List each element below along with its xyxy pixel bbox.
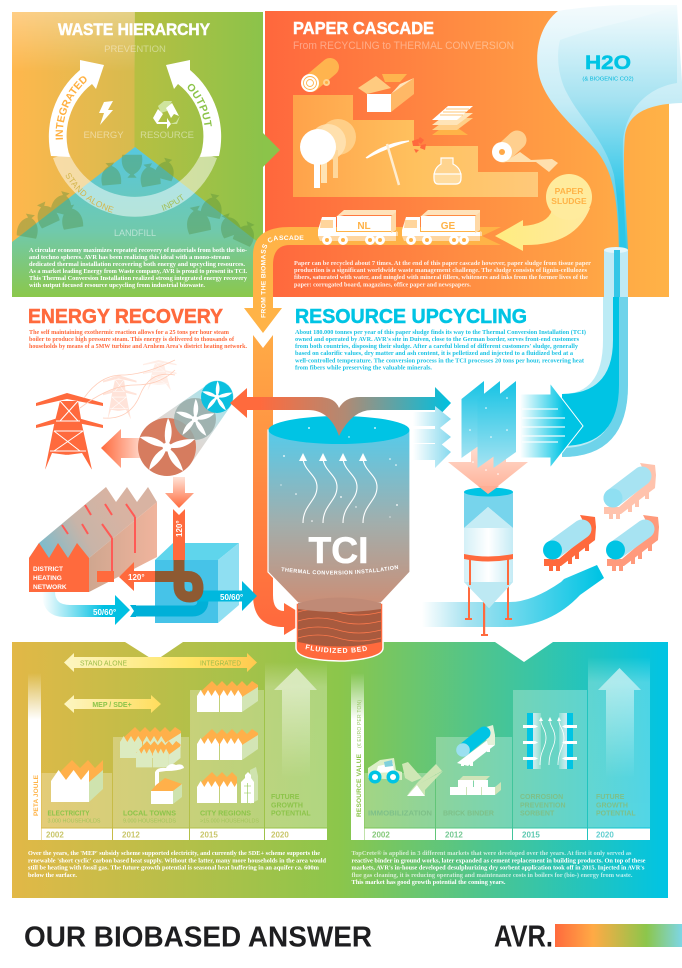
label: TCI: TCI	[308, 530, 368, 571]
tanker: left	[543, 515, 596, 571]
arrow: MEP / SDE+	[64, 695, 161, 713]
text block: resource growth	[352, 850, 646, 886]
labels: markets: CORROSION	[520, 794, 563, 801]
icon: ink jar	[434, 158, 461, 184]
text block: resource upcycling: owned and operated by AVR. AVR's site in Duiven, close to the German border, serves front-end customers	[295, 337, 580, 343]
label: resource: RESOURCE	[140, 130, 194, 141]
red stripes	[62, 504, 135, 572]
label: prevention: PREVENTION	[104, 44, 166, 55]
tanker trucks	[543, 463, 659, 571]
wavy bed lines	[298, 609, 381, 641]
arc label: stand alone: STAND ALONE	[66, 173, 114, 213]
icon: log	[301, 67, 330, 92]
pipe: blue through cube	[130, 581, 257, 617]
arrow: flow splitting to vessel and filter	[260, 387, 451, 436]
text block: energy recovery: boiler to produce high pressure steam. This energy is delivered to thousands of	[29, 337, 235, 343]
silo opening	[464, 488, 513, 496]
silo legs	[465, 555, 512, 636]
arrow: sludge to trucks	[495, 208, 590, 251]
arrow: integrated	[49, 60, 104, 157]
years: 2020	[596, 830, 614, 840]
icon: cement tanker	[456, 725, 495, 766]
circle: paper sludge: PAPER	[555, 186, 583, 196]
glass pipe	[604, 247, 628, 297]
years: 2002	[372, 830, 390, 840]
tanker: top	[604, 463, 656, 519]
label: landfill: LANDFILL	[114, 228, 156, 238]
blue return pipe	[42, 592, 130, 625]
labels: markets: PREVENTION	[520, 802, 566, 810]
district heating network	[29, 487, 157, 592]
icon: cardboard box	[358, 74, 414, 112]
axis label: resource value: RESOURCE VALUE	[356, 753, 363, 817]
stepped paper area	[293, 95, 538, 197]
text block: waste hierarchy	[29, 248, 248, 289]
front with label	[29, 543, 89, 592]
icon: lightning bolt	[99, 101, 113, 125]
text block: energy recovery	[29, 330, 247, 350]
footer title: OUR BIOBASED ANSWER	[24, 922, 372, 954]
columns	[42, 690, 264, 828]
text block: energy growth: renewable 'short cyclic' carbon based heat supply. Without the latter, many more households in the area would	[28, 858, 327, 864]
text block: energy recovery: households by means of a 5MW turbine and Arnhem Area's district heating network.	[29, 344, 247, 350]
text block: resource growth: flue gas cleaning, it is reducing operating and maintenance costs in boilers for (bio-) energy from waste.	[352, 872, 633, 879]
label: H2O: H2O	[585, 53, 631, 74]
years	[46, 830, 289, 840]
labels: households	[48, 819, 259, 825]
pipe: orange heat through cube	[97, 509, 198, 597]
icon: material pile	[407, 764, 443, 796]
text block: paper cascade: paper: corrugated board, magazines, office paper and newspapers.	[294, 282, 472, 288]
text block: waste hierarchy: with output focused resource upcycling from industrial biowaste.	[29, 283, 206, 289]
arrow: future growth	[274, 668, 317, 778]
years: 2002	[46, 830, 64, 840]
circle: paper sludge: SLUDGE	[551, 196, 587, 206]
text block: paper cascade: Paper can be recycled about 7 times. At the end of this paper cascade however, paper sludge from tissue paper	[294, 261, 591, 267]
fluidized bed base	[296, 603, 383, 661]
text block: paper cascade	[294, 261, 591, 288]
labels: markets: IMMOBILIZATION	[368, 811, 432, 818]
labels: column names: GROWTH	[271, 802, 303, 810]
text block: waste hierarchy: dedicated thermal installation recovering both energy and upcycling resources.	[29, 262, 246, 268]
heat exchanger cube	[155, 543, 239, 623]
text block: resource growth: This market has good growth potential the coming years.	[352, 880, 506, 886]
icon: local factory with smoke	[151, 764, 184, 804]
truck: GE	[402, 210, 482, 245]
silo band	[464, 554, 513, 562]
icon: city regions row two	[197, 729, 258, 760]
text block: resource upcycling: from fibers while preserving the valuable minerals.	[295, 366, 433, 372]
logo: AVR: AVR.	[494, 918, 553, 954]
years: 2015	[522, 830, 540, 840]
arrow: biomass cascade band	[253, 227, 501, 297]
icon: local towns factories	[120, 727, 181, 767]
labels: markets: POTENTIAL	[596, 811, 636, 818]
icon: turbine	[138, 381, 233, 476]
icon: main pylon	[36, 393, 103, 470]
icon: corrosion filter	[523, 713, 577, 769]
heading: energy recovery: ENERGY RECOVERY	[28, 305, 223, 328]
panel: waste hierarchy	[12, 12, 263, 297]
years	[372, 830, 614, 840]
arrow: output	[166, 60, 221, 157]
arrow: green notch between panels	[263, 133, 280, 167]
years: 2012	[445, 830, 463, 840]
text block: resource upcycling: well-controlled temperature. The conversion process in the TCI processes 20 tons per hour, recovering heat	[295, 358, 584, 364]
heading: resource upcycling: RESOURCE UPCYCLING	[295, 305, 527, 328]
year row	[364, 828, 650, 840]
silo body	[464, 492, 513, 608]
labels: column names: POTENTIAL	[271, 811, 311, 818]
icon: ore fragments	[412, 137, 426, 153]
text block: resource upcycling: based on calorific values, dry matter and ash content, it is pelletized and injected to a fluidized bed at a	[295, 351, 573, 357]
title: paper cascade: PAPER CASCADE	[293, 18, 434, 38]
labels: markets: FUTURE	[596, 794, 625, 801]
text block: paper cascade: fibers, saturated with water, and mingled with mineral fillers, whiteners and inks from the former lives of the	[294, 275, 588, 281]
icon: electricity factory	[51, 760, 103, 802]
silo	[464, 486, 513, 636]
icon: pulp roll	[300, 119, 356, 188]
rising heat arrows	[299, 453, 377, 523]
text block: energy growth: Over the years, the 'MEP' subsidy scheme supported electricity, and currently the SDE+ scheme supports the	[28, 851, 320, 857]
text block: resource growth: TopCrete® is applied in 3 different markets that were developed over the years. At first it only served as	[352, 850, 632, 857]
panel: paper cascade	[253, 11, 669, 297]
labels: markets: BRICK BINDER	[443, 811, 494, 818]
text block: energy recovery: The self maintaining exothermic reaction allows for a 25 tons per hour steam	[29, 330, 229, 336]
label: 50/60 left: 50/60°	[93, 608, 116, 617]
filter particles	[469, 397, 508, 475]
trucks	[318, 210, 482, 245]
labels: column names: FUTURE	[271, 794, 300, 801]
title: waste hierarchy: WASTE HIERARCHY	[58, 21, 210, 39]
landfill triangle	[12, 147, 263, 297]
ring: lower input arc	[53, 153, 217, 217]
subtitle: From RECYCLING to THERMAL CONVERSION	[293, 40, 514, 52]
vessel top opening	[268, 416, 410, 444]
logo gradient bar	[555, 924, 682, 947]
truck: NL	[318, 210, 398, 245]
labels: column names: ELECTRICITY	[48, 811, 90, 818]
label: 50/60 right: 50/60°	[220, 593, 243, 602]
arrow: MEP / SDE+: MEP / SDE+	[92, 702, 132, 709]
chart: resource value growth	[351, 657, 650, 840]
roof	[29, 487, 157, 558]
blue flow: resource out to trucks	[422, 565, 604, 627]
curved label: fluidized bed: FLUIDIZED BED	[306, 644, 367, 653]
small arrows: to filter	[413, 406, 451, 468]
vessel body	[268, 430, 410, 603]
arrow: stand alone to integrated: INTEGRATED	[200, 660, 241, 668]
arc label: integrated: INTEGRATED	[56, 76, 87, 140]
years: 2015	[200, 830, 218, 840]
icon: wheel loader	[368, 758, 422, 784]
arrow: steam into turbine	[230, 388, 272, 418]
text block: paper cascade: production is a significant worldwide waste management challenge. The sludge consists of lignin-cellulozes	[294, 268, 588, 274]
text block: resource growth: markets, AVR's in-house developed desulphurizing dry sorbent application took off in 2015. Injected in AVR's	[352, 866, 645, 872]
label: 120 horizontal: 120°	[128, 573, 145, 582]
year row	[42, 828, 327, 840]
circle: paper sludge	[546, 174, 592, 220]
labels: markets: GROWTH	[596, 802, 628, 810]
particles	[280, 427, 398, 522]
curved label: thermal conversion installation: THERMAL CONVERSION INSTALLATION	[282, 565, 398, 574]
truck: NL: NL	[357, 221, 371, 232]
text block: energy growth: still be heating with fossil gas. The future growth potential is seasonal heat buffering in an aquifer ca. 600m	[28, 866, 319, 872]
arc label: output: OUTPUT	[188, 84, 212, 126]
axis	[28, 673, 41, 840]
pink arrow: filter to silo	[448, 440, 528, 494]
years: 2020	[271, 830, 289, 840]
label: district heating network: HEATING	[33, 575, 62, 582]
arrow: to pylon	[101, 429, 140, 468]
arrow: turbine down	[165, 477, 194, 508]
labels: markets: SORBENT	[520, 811, 555, 818]
panel: bottom charts background	[12, 642, 668, 898]
arrow: future growth	[598, 668, 641, 778]
text block: resource upcycling: About 180.000 tonnes per year of this paper sludge finds its way to the Thermal Conversion Installation (TCI)	[295, 329, 586, 336]
years: 2012	[122, 830, 140, 840]
label: biogenic co2: (& BIOGENIC CO2)	[582, 76, 634, 82]
icon: city regions row three	[197, 772, 237, 803]
truck: GE: GE	[441, 221, 456, 232]
labels: column names: CITY REGIONS	[200, 811, 251, 818]
text block: energy growth	[28, 851, 327, 879]
text block: waste hierarchy: and techno spheres. AVR has been realizing this ideal with a mono-stream	[29, 255, 230, 261]
label: 120 vertical: 120°	[175, 520, 184, 537]
icon: city regions row one	[197, 681, 258, 712]
labels: column names	[48, 794, 311, 818]
icons: waste bags	[16, 155, 260, 247]
text block: resource upcycling: from both countries, disposing their sludge. After a careful blend of different customers' sludge, generally	[295, 344, 578, 350]
label: district heating network: NETWORK	[33, 584, 67, 591]
chart: energy growth	[28, 653, 327, 840]
text block: waste hierarchy: A circular economy maximizes repeated recovery of materials from both the bio-	[29, 248, 247, 254]
filter plates	[462, 381, 516, 468]
icon: tissue roll	[492, 140, 558, 172]
labels: households: >15.000 HOUSEHOLDS	[200, 819, 259, 825]
label: district heating network	[33, 566, 67, 591]
labels: column names: LOCAL TOWNS	[123, 811, 176, 818]
label: from the biomass cascade: FROM THE BIOMASS CASCADE	[260, 236, 304, 318]
water stream: H2O	[537, 5, 682, 250]
arrow: stand alone to integrated	[64, 653, 257, 672]
big arrow: to water stream	[520, 297, 628, 468]
labels: households: 3.000 HOUSEHOLDS	[48, 819, 101, 825]
columns	[364, 690, 587, 828]
text block: energy growth: below the surface.	[28, 873, 78, 879]
label: district heating network: DISTRICT	[33, 566, 63, 573]
TCI vessel	[267, 387, 451, 662]
arrow: stand alone to integrated: STAND ALONE	[80, 660, 127, 668]
tanker: right	[606, 515, 659, 571]
icon: recycle	[153, 101, 180, 129]
icon: pickaxe	[366, 141, 409, 185]
arrow: biomass band down	[244, 236, 304, 635]
text block: waste hierarchy: As a market leading Energy from Waste company, AVR is proud to present its TCI.	[29, 269, 248, 275]
text block: waste hierarchy: This Thermal Conversion Installation realized strong integrated energy recovery	[29, 276, 247, 282]
icon: ghost pylons and cables	[80, 360, 176, 420]
bed top shadow	[298, 598, 381, 612]
axis label: peta joule: PETA JOULE	[33, 774, 40, 816]
icon: paper stack	[432, 106, 473, 135]
labels: households: 9.000 HOUSEHOLDS	[123, 819, 176, 825]
axis	[351, 673, 364, 840]
text block: resource upcycling	[295, 329, 586, 372]
text block: resource growth: reactive binder in ground works, later expanded as cement replacement in building products. On top of these	[352, 858, 646, 864]
axis label: euro per ton: (€ EURO PER TON)	[357, 700, 363, 748]
icon: bricks	[450, 776, 501, 795]
label: energy: ENERGY	[83, 130, 124, 141]
icon: canal house	[241, 767, 258, 804]
labels: markets	[368, 794, 636, 818]
side wall	[89, 502, 157, 592]
arc label: input: INPUT	[162, 194, 184, 211]
